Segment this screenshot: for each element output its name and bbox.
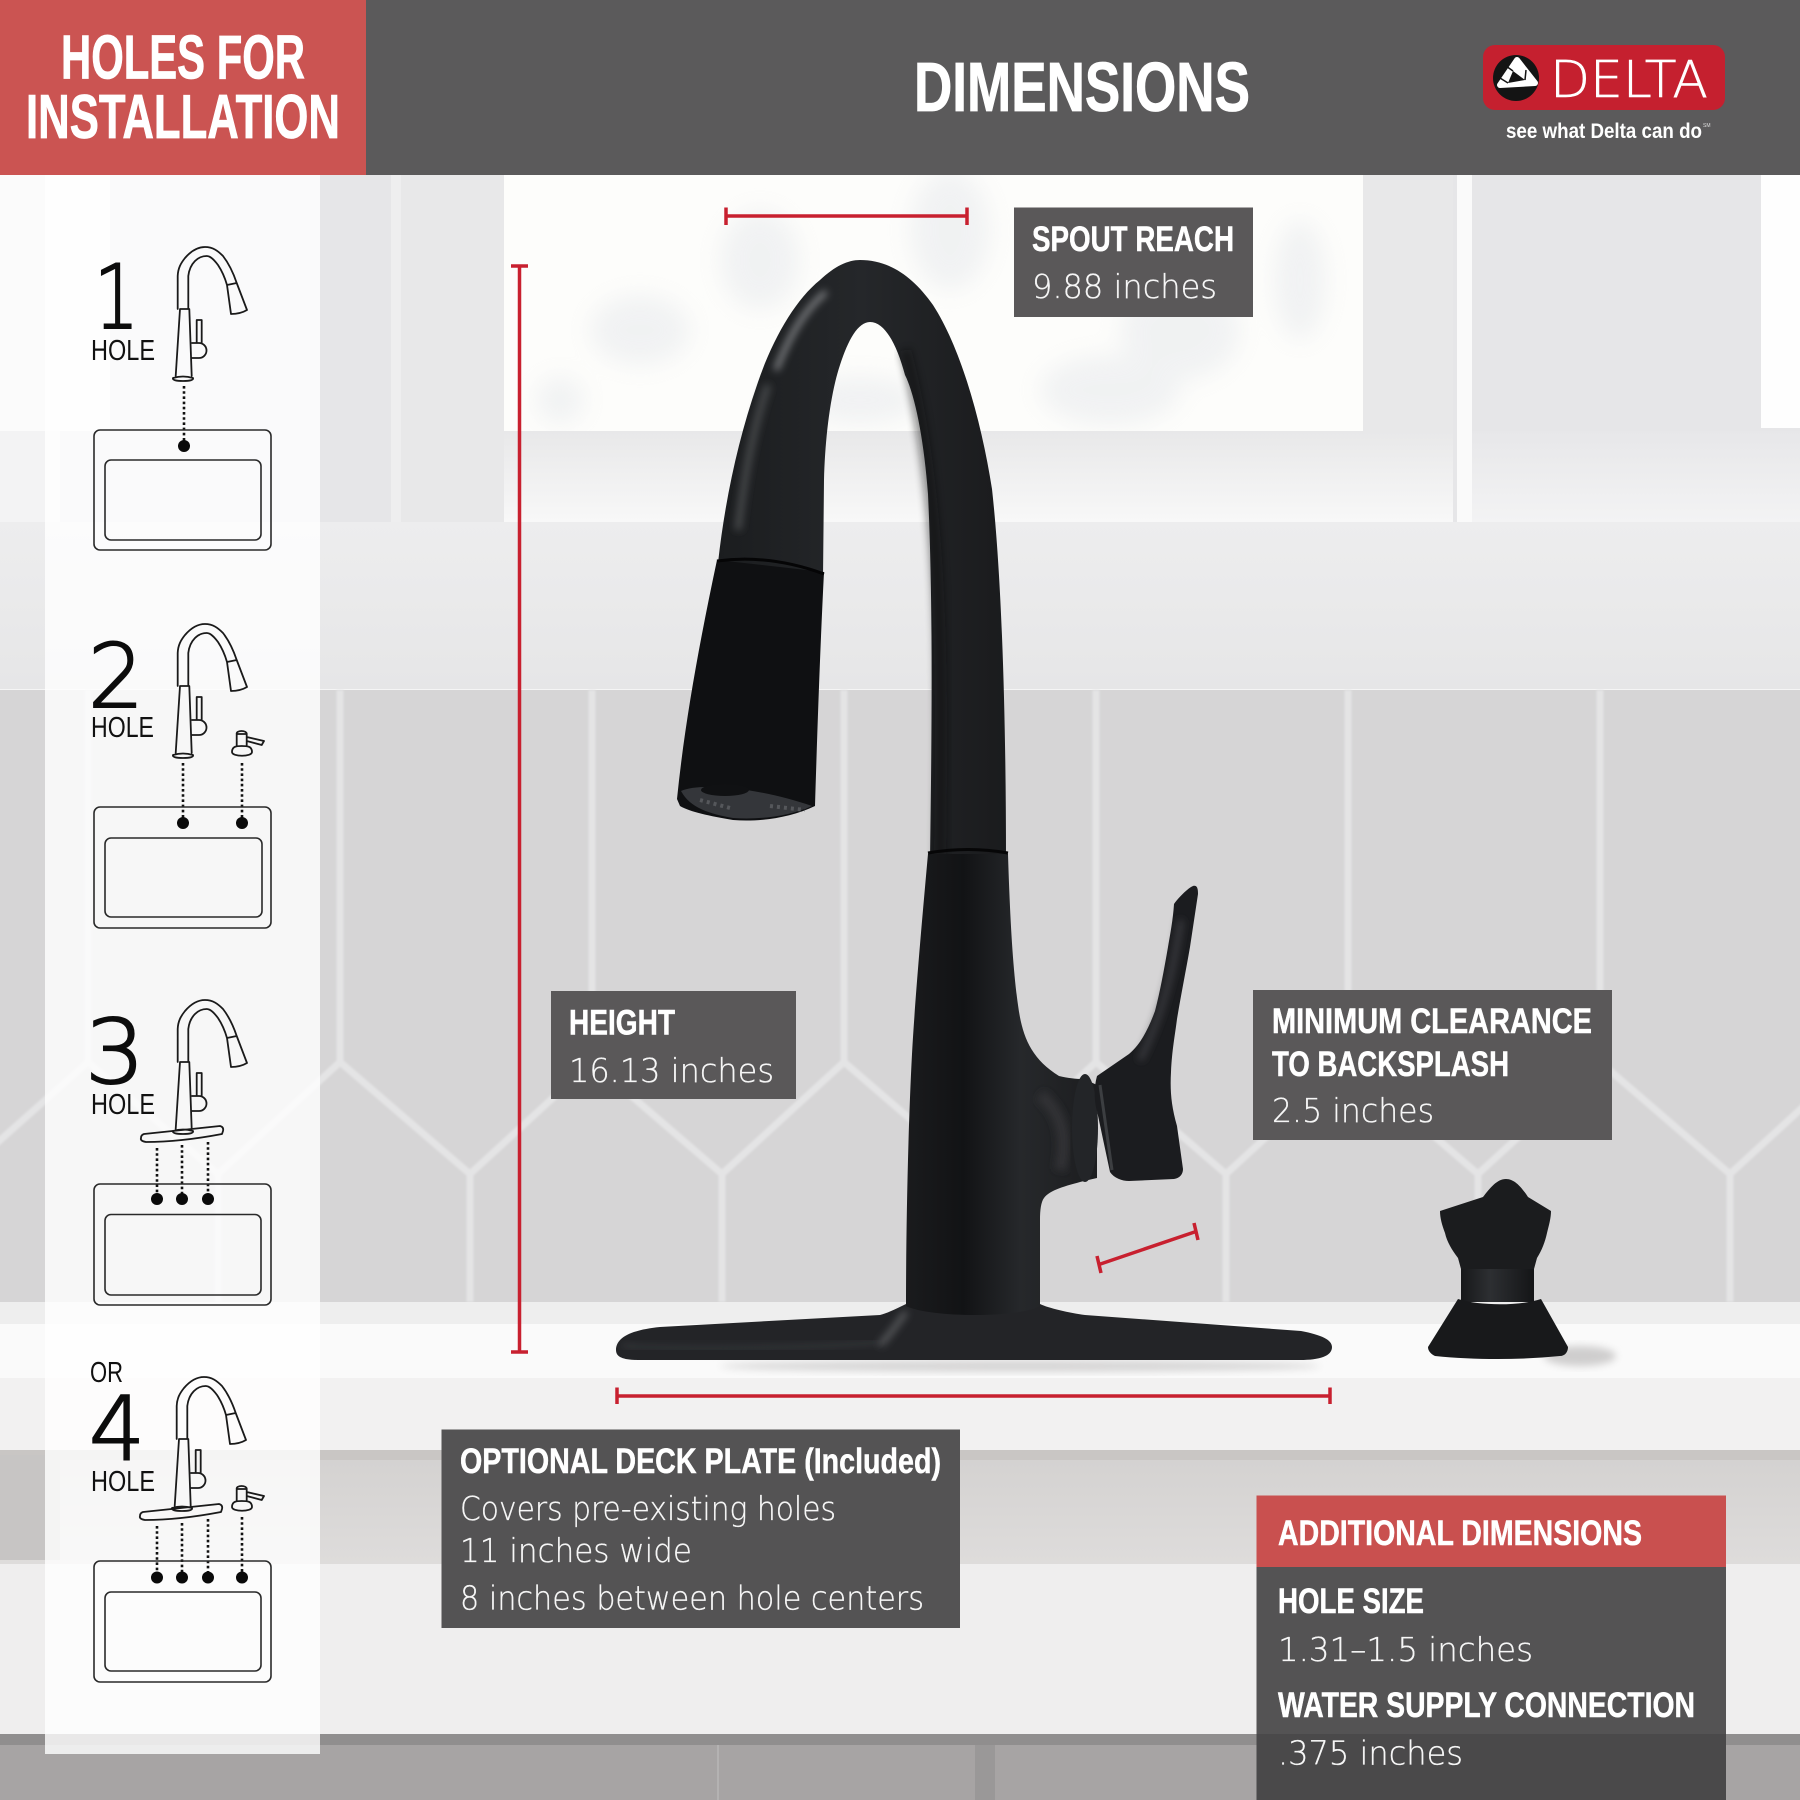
- callout: optional deck plate: 8 inches between hole centers: [460, 1578, 924, 1618]
- logo: Delta: see what Delta can do: [1506, 120, 1702, 143]
- faucet photo: matte black pull-down faucet: [616, 260, 1332, 1360]
- callout: height: HEIGHT: [569, 1004, 675, 1042]
- callout: optional deck plate: OPTIONAL DECK PLATE (Included): [460, 1442, 941, 1481]
- title: dimensions: DIMENSIONS: [914, 48, 1250, 126]
- panel: additional dimensions: HOLE SIZE: [1278, 1582, 1424, 1621]
- option: or 4 hole: [89, 1357, 271, 1682]
- callout: spout reach: [1014, 208, 1253, 317]
- dimension line: backsplash clearance: [1097, 1223, 1198, 1273]
- option: 3 hole: 3: [85, 1001, 145, 1104]
- callout: optional deck plate: [442, 1430, 960, 1628]
- option: 1 hole: 1: [94, 246, 139, 349]
- callout: minimum clearance: MINIMUM CLEARANCE: [1272, 1002, 1592, 1041]
- panel: holes for installation heading: [0, 0, 366, 175]
- panel: holes for installation heading: HOLES FOR: [61, 24, 305, 92]
- header bar: [366, 0, 1800, 175]
- logo: Delta: SM: [1703, 123, 1710, 129]
- option: 3 hole: HOLE: [91, 1089, 155, 1121]
- option: 3 hole: [85, 1000, 271, 1305]
- option: 2 hole: [88, 624, 271, 928]
- callout: minimum clearance: TO BACKSPLASH: [1272, 1045, 1509, 1084]
- callout: minimum clearance: 2.5 inches: [1272, 1091, 1434, 1130]
- option: or 4 hole: 4: [89, 1378, 145, 1480]
- dimension line: spout reach: [726, 208, 967, 225]
- callout: height: [551, 991, 796, 1099]
- option: or 4 hole: OR: [90, 1357, 123, 1389]
- soap dispenser: [1428, 1179, 1568, 1359]
- panel: hole options: [45, 175, 320, 1754]
- option: 1 hole: [91, 246, 271, 550]
- dimension line: height: [511, 266, 528, 1352]
- panel heading: additional dimensions: ADDITIONAL DIMENSIONS: [1278, 1514, 1642, 1553]
- logo: Delta: DELTA: [1550, 51, 1708, 110]
- callout: spout reach: SPOUT REACH: [1032, 220, 1234, 259]
- callout: spout reach: 9.88 inches: [1032, 267, 1217, 306]
- panel: additional dimensions: [1256, 1496, 1726, 1800]
- option: or 4 hole: HOLE: [91, 1466, 155, 1498]
- option: 2 hole: HOLE: [91, 712, 154, 744]
- callout: optional deck plate: 11 inches wide: [460, 1531, 692, 1570]
- callout: minimum clearance: [1253, 990, 1612, 1140]
- logo: Delta: [1483, 45, 1725, 143]
- panel: additional dimensions: 1.31–1.5 inches: [1278, 1630, 1533, 1669]
- panel: additional dimensions: .375 inches: [1278, 1734, 1463, 1772]
- panel: additional dimensions: WATER SUPPLY CONNECTION: [1278, 1686, 1695, 1725]
- panel: holes for installation heading: INSTALLATION: [26, 83, 340, 152]
- panel heading: additional dimensions: [1256, 1496, 1726, 1567]
- option: 2 hole: 2: [88, 625, 144, 728]
- option: 1 hole: HOLE: [91, 335, 155, 367]
- callout: height: 16.13 inches: [569, 1051, 774, 1090]
- dimension line: deck plate width: [617, 1388, 1330, 1404]
- callout: optional deck plate: Covers pre-existing holes: [460, 1489, 836, 1528]
